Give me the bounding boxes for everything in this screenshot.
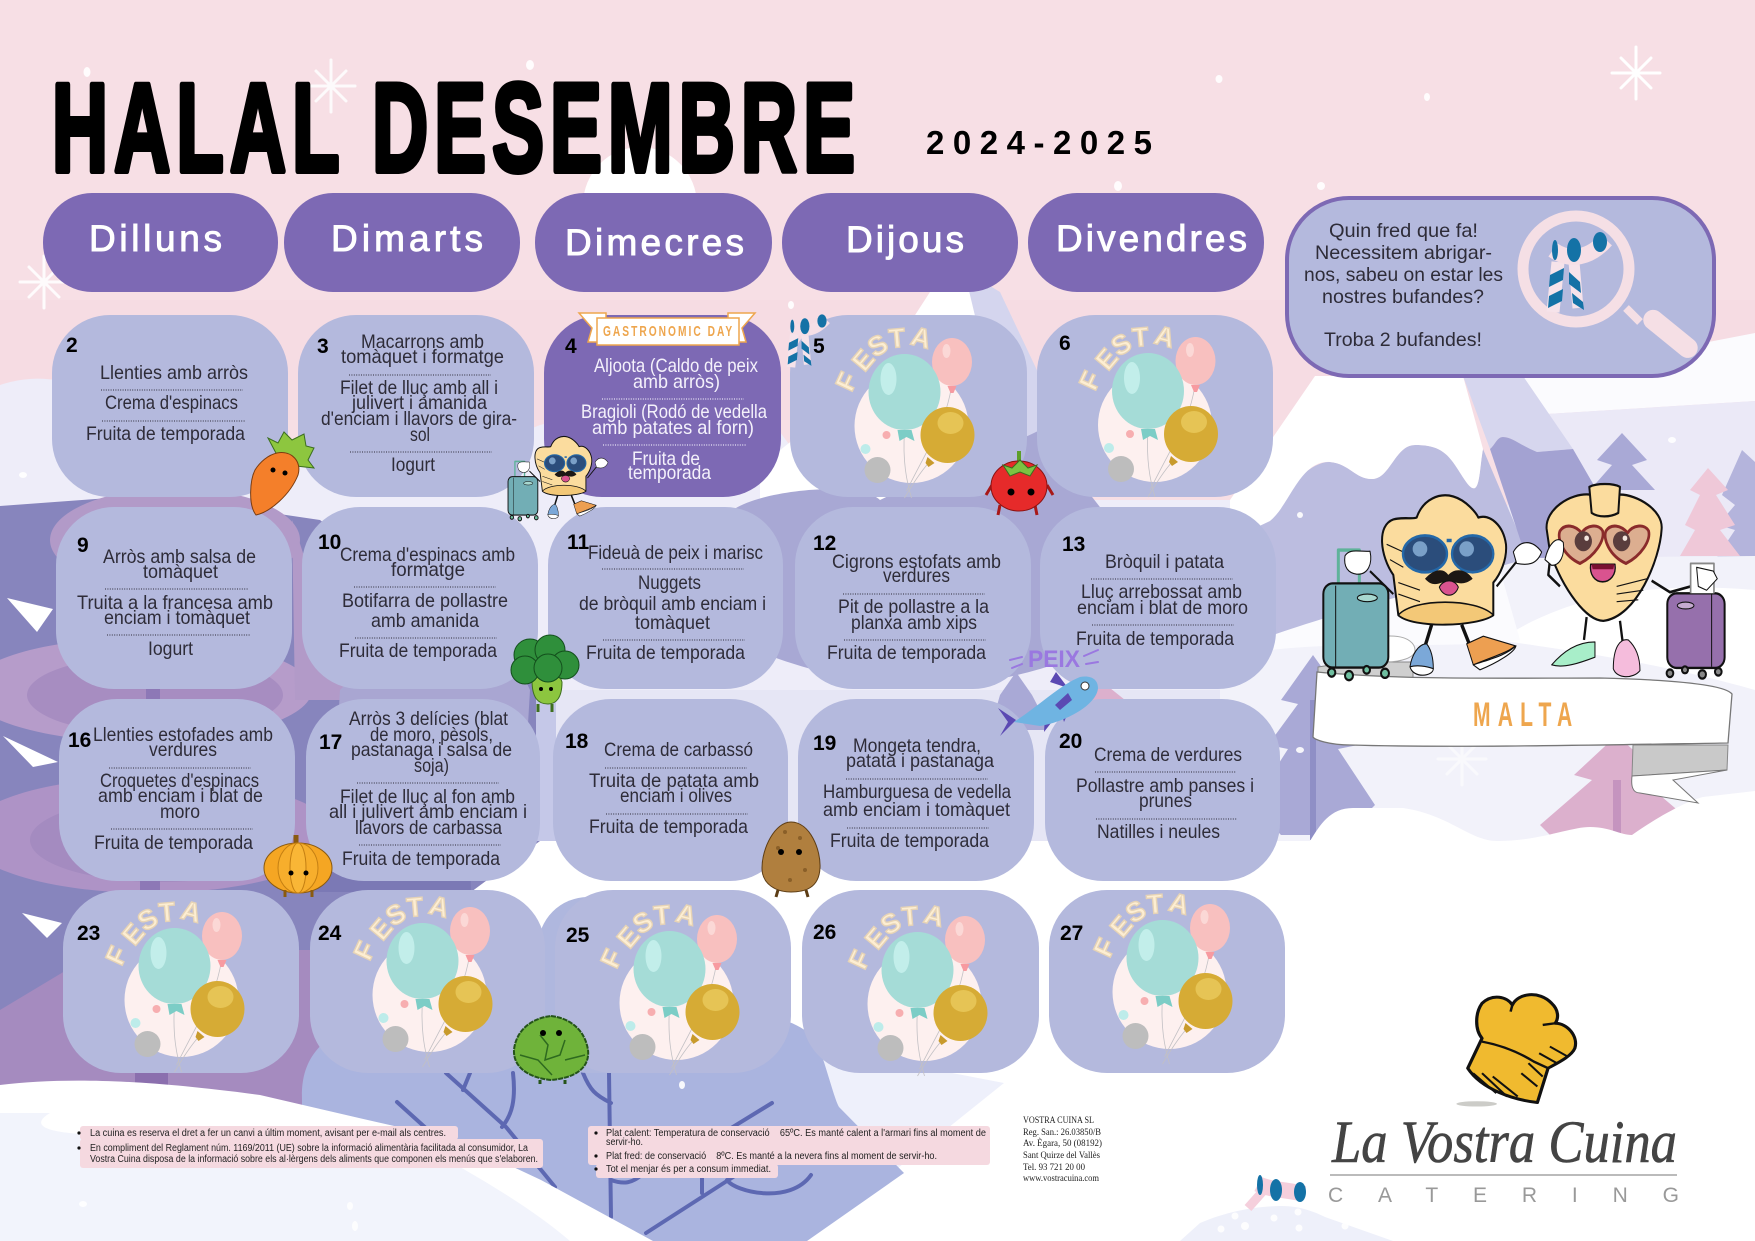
festa balloons bbox=[595, 898, 740, 1075]
menu text: Fruita de bbox=[632, 448, 700, 470]
menu text bbox=[86, 362, 248, 445]
date number: 16 bbox=[68, 729, 91, 752]
puzzle text: Quin fred que fa! bbox=[1329, 220, 1478, 242]
festa balloons bbox=[100, 895, 244, 1072]
icon: magnifier with scarf bbox=[1523, 216, 1691, 348]
mascot: garlic with suitcase bbox=[1545, 484, 1725, 679]
icon: broccoli bbox=[511, 635, 579, 712]
menu text: Fruita de temporada bbox=[1076, 628, 1234, 650]
menu text: formatge bbox=[391, 559, 465, 581]
panel: day 17 bbox=[306, 699, 540, 881]
date number: 24 bbox=[318, 922, 342, 945]
panel: day 4 gastronomic day bbox=[544, 313, 781, 497]
panel: day 13 bbox=[1040, 507, 1276, 689]
legal notes bbox=[77, 1126, 543, 1168]
panel: day 2 bbox=[52, 315, 288, 497]
panel: day 24 festa bbox=[310, 890, 545, 1073]
festa balloons: FESTA bbox=[1073, 320, 1178, 395]
menu text: amb patates al forn) bbox=[592, 417, 754, 439]
panel: day 6 festa bbox=[1037, 315, 1273, 497]
weekday headers bbox=[43, 193, 1264, 292]
menu text: Lluç arrebossat amb bbox=[1081, 581, 1242, 603]
header: Dijous: Dijous bbox=[846, 219, 964, 260]
menu text: Pit de pollastre a la bbox=[838, 596, 989, 618]
header: Dijous bbox=[782, 193, 1018, 292]
date number: 26 bbox=[813, 921, 836, 944]
menu text: Filet de lluç amb all i bbox=[340, 377, 498, 399]
menu text bbox=[827, 551, 1001, 664]
icon: fish label bbox=[1010, 646, 1098, 673]
puzzle text: Troba 2 bufandes! bbox=[1324, 329, 1482, 351]
menu text: amb enciam i tomàquet bbox=[823, 799, 1011, 821]
festa balloons bbox=[830, 321, 974, 498]
date number: 11 bbox=[567, 531, 590, 554]
icon: fish bbox=[998, 672, 1098, 736]
menu text: Mongeta tendra, bbox=[853, 735, 981, 757]
date number: 23 bbox=[77, 922, 100, 945]
panel: day 5 festa bbox=[788, 314, 1027, 498]
menu text: enciam i olives bbox=[620, 785, 732, 807]
menu text: verdures bbox=[883, 565, 950, 587]
icon: hidden scarf bbox=[788, 314, 827, 367]
menu text: Iogurt bbox=[148, 638, 194, 660]
menu text: sol bbox=[410, 424, 430, 446]
icon: hidden scarf bottom bbox=[1248, 1175, 1306, 1208]
festa balloons: FESTA bbox=[348, 890, 453, 965]
logo: La Vostra Cuina bbox=[1328, 995, 1679, 1207]
festa balloons: FESTA bbox=[595, 898, 700, 973]
menu text: Fruita de temporada bbox=[342, 848, 500, 870]
food safety notes: Plat fred: de conservació 8ºC. Es manté a la nevera fins al moment de servir-ho. bbox=[606, 1151, 937, 1162]
festa balloons: FESTA bbox=[830, 321, 935, 396]
mascot: toque on tour bbox=[508, 436, 608, 521]
company address: Sant Quirze del Vallès bbox=[1023, 1151, 1100, 1161]
date number: 10 bbox=[318, 531, 341, 554]
panel: day 20 bbox=[1045, 699, 1280, 881]
date number: 17 bbox=[319, 731, 342, 754]
date number: 6 bbox=[1059, 332, 1071, 355]
menu text: Llenties amb arròs bbox=[100, 362, 248, 384]
company address bbox=[1023, 1116, 1102, 1184]
panel: day 16 bbox=[59, 699, 295, 881]
festa balloons: FESTA bbox=[1088, 887, 1193, 962]
menu text: planxa amb xips bbox=[851, 612, 977, 634]
date number: 18 bbox=[565, 730, 589, 753]
menu text bbox=[589, 739, 759, 838]
puzzle text: nos, sabeu on estar les bbox=[1304, 264, 1503, 286]
menu text: Hamburguesa de vedella bbox=[823, 781, 1011, 803]
menu text bbox=[1076, 551, 1248, 650]
date number: 4 bbox=[565, 335, 577, 358]
food safety notes: Tot el menjar és per a consum immediat. bbox=[606, 1164, 771, 1175]
title: HALAL DESEMBRE bbox=[52, 59, 855, 199]
icon: pumpkin bbox=[264, 835, 332, 897]
header: Dimarts: Dimarts bbox=[331, 218, 483, 259]
menu text: Botifarra de pollastre bbox=[342, 590, 508, 612]
logo: La Vostra Cuina: La Vostra Cuina bbox=[1331, 1109, 1677, 1175]
header: Dimecres bbox=[535, 193, 772, 292]
menu text: Cigrons estofats amb bbox=[832, 551, 1001, 573]
date number: 13 bbox=[1062, 533, 1085, 556]
menu text: Fruita de temporada bbox=[827, 642, 986, 664]
menu text bbox=[1076, 744, 1254, 843]
menu text: Truita a la francesa amb bbox=[77, 592, 273, 614]
date number: 9 bbox=[77, 534, 89, 557]
menu text bbox=[329, 708, 527, 870]
menu text bbox=[93, 724, 273, 854]
menu text: Llenties estofades amb bbox=[93, 724, 273, 746]
date number: 12 bbox=[813, 532, 836, 555]
menu text: enciam i tomàquet bbox=[104, 607, 251, 629]
panel: day 23 festa bbox=[63, 890, 299, 1073]
menu text: tomàquet bbox=[143, 561, 219, 583]
icon: lettuce bbox=[514, 1016, 588, 1084]
menu text: tomàquet bbox=[635, 612, 711, 634]
menu text bbox=[579, 542, 766, 664]
menu text: Fruita de temporada bbox=[830, 830, 989, 852]
menu text: Bròquil i patata bbox=[1105, 551, 1224, 573]
puzzle text: nostres bufandes? bbox=[1322, 286, 1484, 308]
panel: day 27 festa bbox=[1049, 887, 1285, 1073]
panel: day 11 bbox=[548, 507, 783, 689]
festa balloons: FESTA bbox=[843, 899, 948, 974]
date number: 5 bbox=[813, 335, 825, 358]
date number: 3 bbox=[317, 335, 329, 358]
menu text: prunes bbox=[1139, 790, 1192, 812]
date number: 27 bbox=[1060, 922, 1083, 945]
menu text: Bragioli (Rodó de vedella bbox=[581, 401, 767, 423]
menu text: Iogurt bbox=[391, 454, 436, 476]
menu text: llavors de carbassa bbox=[355, 817, 502, 839]
ribbon: gastronomic day: GASTRONOMIC DAY bbox=[603, 322, 733, 340]
menu text: Croquetes d'espinacs bbox=[100, 770, 259, 792]
festa balloons: FESTA bbox=[100, 895, 205, 970]
menu text bbox=[77, 546, 273, 660]
menu text: Truita de patata amb bbox=[589, 770, 759, 792]
panel: day 3 bbox=[298, 315, 534, 497]
menu text: amb arròs) bbox=[633, 371, 720, 393]
menu text: Fideuà de peix i marisc bbox=[588, 542, 763, 564]
menu text bbox=[823, 735, 1011, 852]
menu text: Fruita de temporada bbox=[86, 423, 245, 445]
festa balloons bbox=[1088, 887, 1232, 1064]
menu text: Macarrons amb bbox=[361, 331, 484, 353]
logo: La Vostra Cuina: CATERING bbox=[1328, 1184, 1679, 1207]
header: Dilluns bbox=[43, 193, 278, 292]
menu text: Crema d'espinacs bbox=[105, 392, 238, 414]
food safety notes: servir-ho. bbox=[606, 1137, 643, 1148]
panel: day 18 bbox=[553, 699, 788, 881]
menu text: soja) bbox=[414, 755, 449, 777]
menu text: verdures bbox=[149, 739, 217, 761]
menu text: Filet de lluç al fon amb bbox=[340, 786, 515, 808]
menu text: tomàquet i formatge bbox=[341, 346, 504, 368]
destination: MALTA bbox=[1473, 695, 1572, 733]
menu text: Fruita de temporada bbox=[589, 816, 748, 838]
menu text: de moro, pèsols, bbox=[370, 724, 493, 746]
menu text: amb amanida bbox=[371, 610, 479, 632]
header: Divendres: Divendres bbox=[1056, 218, 1247, 259]
menu text: patata i pastanaga bbox=[846, 750, 994, 772]
puzzle text: Necessitem abrigar- bbox=[1315, 242, 1492, 264]
menu text: Crema de carbassó bbox=[604, 739, 753, 761]
icon: chef hat bbox=[1456, 995, 1576, 1107]
menu text: de bròquil amb enciam i bbox=[579, 593, 766, 615]
menu text: enciam i blat de moro bbox=[1077, 597, 1248, 619]
panel: day 19 bbox=[798, 699, 1034, 881]
food safety notes bbox=[588, 1126, 990, 1178]
legal notes: Vostra Cuina disposa de la informació sobre els al·lèrgens dels aliments que componen els menús que s'elaboren. bbox=[90, 1154, 538, 1165]
menu text: julivert i amanida bbox=[351, 392, 487, 414]
panel: day 12 bbox=[795, 507, 1031, 689]
ribbon: gastronomic day bbox=[579, 313, 755, 345]
panel: day 25 festa bbox=[538, 890, 791, 1075]
menu text: d'enciam i llavors de gira- bbox=[321, 408, 517, 430]
menu text: Fruita de temporada bbox=[339, 640, 497, 662]
company address: www.vostracuina.com bbox=[1023, 1174, 1100, 1184]
date number: 19 bbox=[813, 732, 836, 755]
date number: 25 bbox=[566, 924, 590, 947]
icon: potato bbox=[762, 822, 820, 897]
menu text bbox=[339, 544, 515, 662]
menu text: Aljoota (Caldo de peix bbox=[594, 355, 758, 377]
header: Dilluns: Dilluns bbox=[89, 218, 222, 259]
date number: 20 bbox=[1059, 730, 1082, 753]
menu text: amb enciam i blat de bbox=[98, 785, 263, 807]
icon: fish label: PEIX bbox=[1028, 646, 1080, 673]
menu text: Arròs amb salsa de bbox=[103, 546, 256, 568]
header: Dimecres: Dimecres bbox=[565, 222, 744, 263]
panel: day 26 festa bbox=[802, 890, 1039, 1076]
food safety notes: Plat calent: Temperatura de conservació 65ºC. Es manté calent a l'armari fins al moment de bbox=[606, 1128, 986, 1139]
ribbon: Malta bbox=[1313, 636, 1732, 803]
menu text: Crema d'espinacs amb bbox=[340, 544, 515, 566]
menu text: pastanaga i salsa de bbox=[351, 739, 512, 761]
legal notes: En compliment del Reglament núm. 1169/2011 (UE) sobre la informació alimentària facilitada al consumidor, La bbox=[90, 1143, 528, 1154]
menu text: temporada bbox=[628, 462, 711, 484]
festa balloons bbox=[348, 890, 492, 1067]
icon: carrot bbox=[251, 432, 314, 515]
menu text: Pollastre amb panses i bbox=[1076, 775, 1254, 797]
header: Divendres bbox=[1028, 193, 1264, 292]
menu text: Crema de verdures bbox=[1094, 744, 1242, 766]
panel: scarf puzzle bbox=[1287, 198, 1714, 376]
panel: day 10 bbox=[302, 507, 538, 689]
festa balloons bbox=[1073, 320, 1218, 497]
company address: Tel. 93 721 20 00 bbox=[1023, 1163, 1085, 1173]
puzzle text bbox=[1304, 220, 1503, 351]
legal notes: La cuina es reserva el dret a fer un canvi a últim moment, avisant per e-mail als centres. bbox=[90, 1128, 446, 1139]
header: Dimarts bbox=[284, 193, 520, 292]
menu text: Natilles i neules bbox=[1097, 821, 1220, 843]
menu text: Fruita de temporada bbox=[586, 642, 745, 664]
menu text: all i julivert amb enciam i bbox=[329, 801, 527, 823]
company address: Av. Ègara, 50 (08192) bbox=[1023, 1137, 1102, 1149]
menu text bbox=[581, 355, 767, 484]
menu text: moro bbox=[160, 801, 200, 823]
company address: Reg. San.: 26.03850/B bbox=[1023, 1128, 1101, 1138]
menu text: Arròs 3 delícies (blat bbox=[349, 708, 509, 730]
menu text: Fruita de temporada bbox=[94, 832, 253, 854]
icon: tomato bbox=[986, 451, 1053, 515]
mascot: chef toque with suitcase bbox=[1323, 495, 1542, 680]
school year: 2024-2025 bbox=[926, 124, 1152, 161]
festa balloons bbox=[843, 899, 988, 1076]
menu text bbox=[321, 331, 517, 476]
menu text: Nuggets bbox=[638, 572, 701, 594]
date number: 2 bbox=[66, 334, 78, 357]
company address: VOSTRA CUINA SL bbox=[1023, 1116, 1094, 1126]
panel: day 9 bbox=[56, 507, 292, 689]
